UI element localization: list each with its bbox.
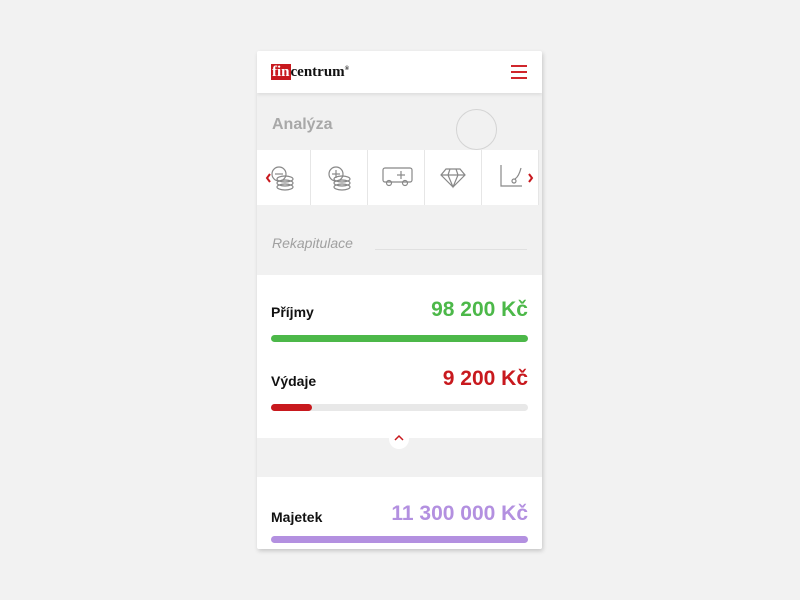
value: Výdaje: 9 200 Kč — [443, 367, 528, 390]
label: Příjmy: Příjmy — [271, 304, 314, 320]
icon: collapse chevron — [389, 429, 409, 449]
icons — [266, 165, 534, 191]
header — [257, 51, 542, 93]
bar: Majetek — [271, 536, 528, 543]
panel: income/expenses — [257, 275, 542, 438]
label: Výdaje: Výdaje — [271, 373, 316, 389]
icon: menu — [511, 65, 527, 79]
phone screen — [257, 51, 542, 549]
logo: fincentrum® — [272, 64, 349, 80]
circle — [456, 109, 497, 150]
value: Majetek: 11 300 000 Kč — [391, 502, 528, 525]
label: Majetek: Majetek — [271, 509, 322, 525]
heading: Rekapitulace: Rekapitulace — [272, 235, 353, 251]
panel: assets — [257, 477, 542, 549]
icon strip — [257, 150, 539, 205]
heading: Analýza: Analýza — [272, 116, 332, 133]
bar: Výdaje — [271, 404, 528, 411]
bar: Příjmy — [271, 335, 528, 342]
value: Příjmy: 98 200 Kč — [431, 298, 528, 321]
